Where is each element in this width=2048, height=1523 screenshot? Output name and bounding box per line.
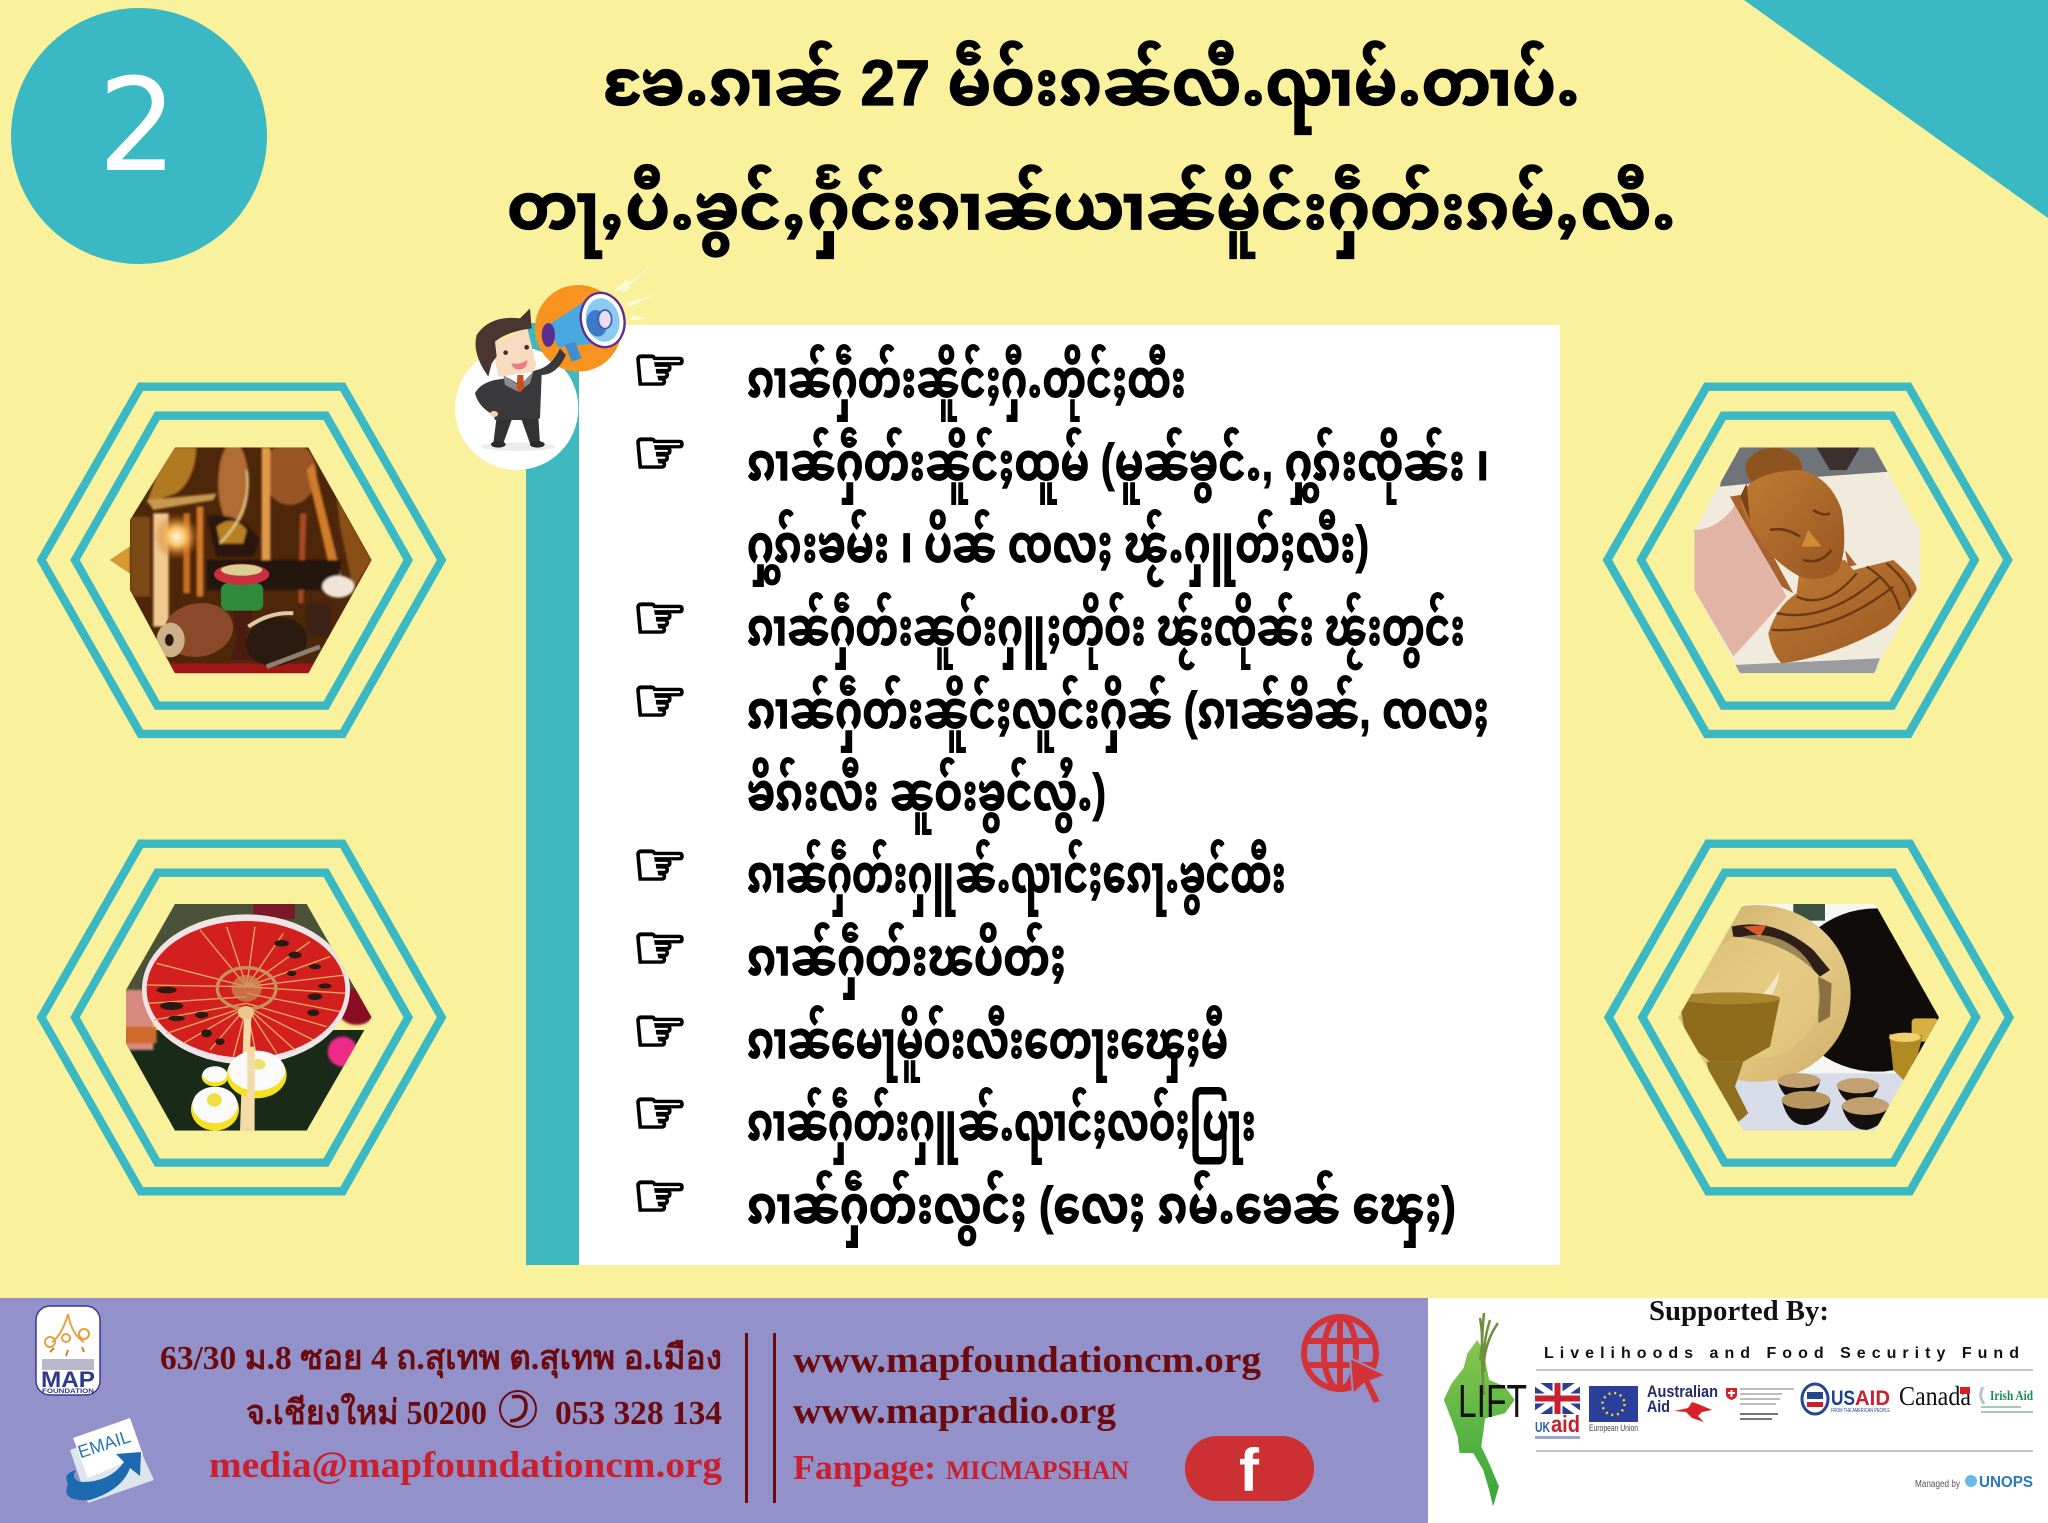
icon: email	[66, 1418, 154, 1503]
Swiss logo	[1726, 1388, 1794, 1420]
bullet hands: ☞	[632, 828, 688, 901]
bullet hands: ☞	[632, 664, 688, 737]
list: bullets and text	[632, 333, 1489, 1247]
photo: red umbrella	[120, 900, 377, 1133]
megaphone character	[455, 265, 656, 470]
icon: email: EMAIL	[75, 1426, 133, 1462]
fanpage: Fanpage:	[793, 1448, 936, 1487]
number badge: 2	[98, 52, 177, 201]
icon: MAP logo: FOUNDATION	[42, 1388, 94, 1395]
list text: ၶိၵ်းလီး ၼူဝ်းၶွင်လွႆႉ)	[747, 757, 1106, 834]
list text: ႁွၵ်းၶမ်း ၊ ပိၼ် ၸလႈ ၽႂ်ႉႁူတ်ႈလီး)	[747, 509, 1369, 587]
small parasols	[191, 1047, 287, 1132]
USAID logo: US	[1831, 1387, 1855, 1410]
USAID logo: AID	[1855, 1387, 1890, 1410]
websites: www.mapfoundationcm.org	[793, 1340, 1262, 1381]
title: တႃႇပီႉၶွင်ႇႁႅင်းၵၢၼ်ယၢၼ်မိူင်းႁဵတ်းၵမ်ႇလီႉ	[507, 163, 1676, 259]
list text: ၵၢၼ်ႁဵတ်းၼိူင်ႈႁီႉတိုင်ႈထီး	[747, 344, 1186, 421]
umbrella blossoms	[157, 940, 332, 1045]
icon: globe cursor	[1304, 1317, 1386, 1404]
umbrella ribs	[147, 927, 345, 1057]
carved head	[1740, 448, 1857, 579]
footer: contact panel	[0, 1298, 1428, 1523]
address: 63/30 ม.8 ซอย 4 ถ.สุเทพ ต.สุเทพ อ.เมือง	[160, 1339, 722, 1379]
websites	[793, 1340, 1262, 1432]
divider	[773, 1333, 776, 1503]
photo: wooden Buddha	[1690, 443, 1923, 677]
bullet hands: ☞	[632, 416, 688, 489]
hand	[1694, 497, 1787, 657]
list text: ၵၢၼ်ႁဵတ်းႁူၼ်ႉၺၢင်ႈလဝ်ႈပြႃး	[747, 1087, 1256, 1164]
title: ၶႄႉၵၢၼ် 27 မဵဝ်းၵၼ်လီႉၺၢမ်ႉတၢပ်ႉ	[603, 39, 1580, 135]
dark drum	[242, 612, 320, 671]
supported by heading: Supported By:	[1649, 1296, 1829, 1327]
Australian Aid logo: Australian	[1647, 1382, 1718, 1401]
hexagon: lacquerware	[1609, 844, 2009, 1191]
icon: megaphone	[542, 289, 630, 362]
Australian Aid logo	[1647, 1382, 1718, 1422]
icon: MAP logo: MAP	[41, 1367, 95, 1392]
Irish Aid logo: Irish Aid	[1990, 1389, 2033, 1404]
bullet hands: ☞	[632, 1159, 688, 1232]
hexagon: instruments	[41, 387, 442, 734]
list text: ၵၢၼ်ႁဵတ်းၼူဝ်းႁူႈတိုဝ်း ၽႂ်းၸိုၼ်း ၽႂ်းတွင်း	[747, 592, 1465, 670]
rule	[1536, 1369, 2033, 1371]
Canada logo: Canada	[1899, 1381, 1971, 1411]
icon: facebook	[1185, 1436, 1314, 1504]
title	[507, 39, 1676, 259]
bullet hands	[632, 333, 688, 1232]
UK aid logo: aid	[1551, 1411, 1580, 1437]
bullet hands: ☞	[632, 911, 688, 984]
list text: ၵၢၼ်ႁဵတ်းၼိူင်ႈထူမ် (မူၼ်ၶွင်ႉ, ႁွၵ်းၸိုၼ်း ၊	[747, 427, 1489, 504]
rule	[1536, 1450, 2033, 1452]
icon: circled phone	[500, 1391, 536, 1427]
icon: MAP logo	[36, 1306, 100, 1395]
address: 053 328 134	[555, 1395, 722, 1432]
EU logo	[1589, 1386, 1638, 1433]
list text: ၵၢၼ်ႁဵတ်းႁူၼ်ႉၺၢင်ႈၵေႃႉၶွင်ထီး	[747, 839, 1286, 916]
websites: www.mapradio.org	[793, 1391, 1117, 1432]
bullet hands: ☞	[632, 994, 688, 1067]
UNOPS managed by: UNOPS	[1979, 1474, 2033, 1491]
list text: ၵၢၼ်ႁဵတ်းလွင်ႈ (လေႈ ၵမ်ႉၶေၼ် ၾေႈ)	[747, 1170, 1456, 1247]
bullet hands: ☞	[632, 581, 688, 654]
panel: white list	[579, 325, 1560, 1265]
hexagon: carved Buddha	[1607, 387, 2008, 734]
fund name: Livelihoods and Food Security Fund	[1544, 1345, 2019, 1362]
gold cups	[1889, 1018, 1938, 1080]
number badge	[11, 8, 267, 264]
bullet hands: ☞	[632, 333, 688, 406]
green drum	[214, 564, 269, 660]
USAID logo: FROM THE AMERICAN PEOPLE	[1831, 1408, 1890, 1414]
Australian Aid logo: Aid	[1647, 1397, 1670, 1416]
photo: musical instruments	[107, 442, 377, 677]
hexagon: paper umbrella	[41, 844, 442, 1191]
icon: sound lines	[613, 265, 656, 320]
list text: ၵၢၼ်ႁဵတ်းၼိူင်ႈလူင်းႁိၼ် (ၵၢၼ်ၶိၼ်, ၸလႈ	[747, 675, 1489, 752]
address: จ.เชียงใหม่ 50200	[246, 1392, 487, 1432]
black cups	[1777, 1073, 1889, 1130]
EU logo: European Union	[1589, 1423, 1638, 1433]
Irish Aid logo	[1981, 1387, 2033, 1413]
bullet hands: ☞	[632, 1076, 688, 1149]
address	[160, 1339, 722, 1432]
email address: media@mapfoundationcm.org	[209, 1445, 723, 1486]
icon: facebook: f	[1239, 1437, 1260, 1504]
list text	[747, 344, 1489, 1247]
UNOPS managed by: Managed by	[1915, 1479, 1960, 1490]
photo: gold and black lacquerware	[1678, 904, 1939, 1130]
fanpage: MICMAPSHAN	[946, 1456, 1129, 1485]
brown drum	[156, 603, 233, 658]
map of Myanmar	[1444, 1340, 1515, 1506]
LIFT logo	[1444, 1313, 1527, 1506]
corner triangle	[1744, 0, 2048, 218]
UK aid logo: UK	[1535, 1419, 1550, 1436]
list text: ၵၢၼ်မေႃမိူဝ်းလီးတေႃးၾေႈမီ	[747, 1005, 1228, 1082]
USAID logo	[1802, 1384, 1890, 1414]
UK aid logo	[1535, 1383, 1580, 1439]
gold footed bowl	[1678, 992, 1780, 1123]
LIFT logo: LIFT	[1458, 1375, 1527, 1427]
divider	[745, 1333, 748, 1503]
carved shoulders	[1768, 560, 1917, 663]
fanpage	[793, 1448, 1129, 1487]
footer: supporters panel	[1428, 1296, 2048, 1523]
panel: teal strip	[526, 323, 586, 1265]
UNOPS managed by	[1915, 1474, 2033, 1491]
list text: ၵၢၼ်ႁဵတ်းၽပိတ်ႈ	[747, 922, 1066, 999]
icon: businessman	[475, 308, 566, 451]
